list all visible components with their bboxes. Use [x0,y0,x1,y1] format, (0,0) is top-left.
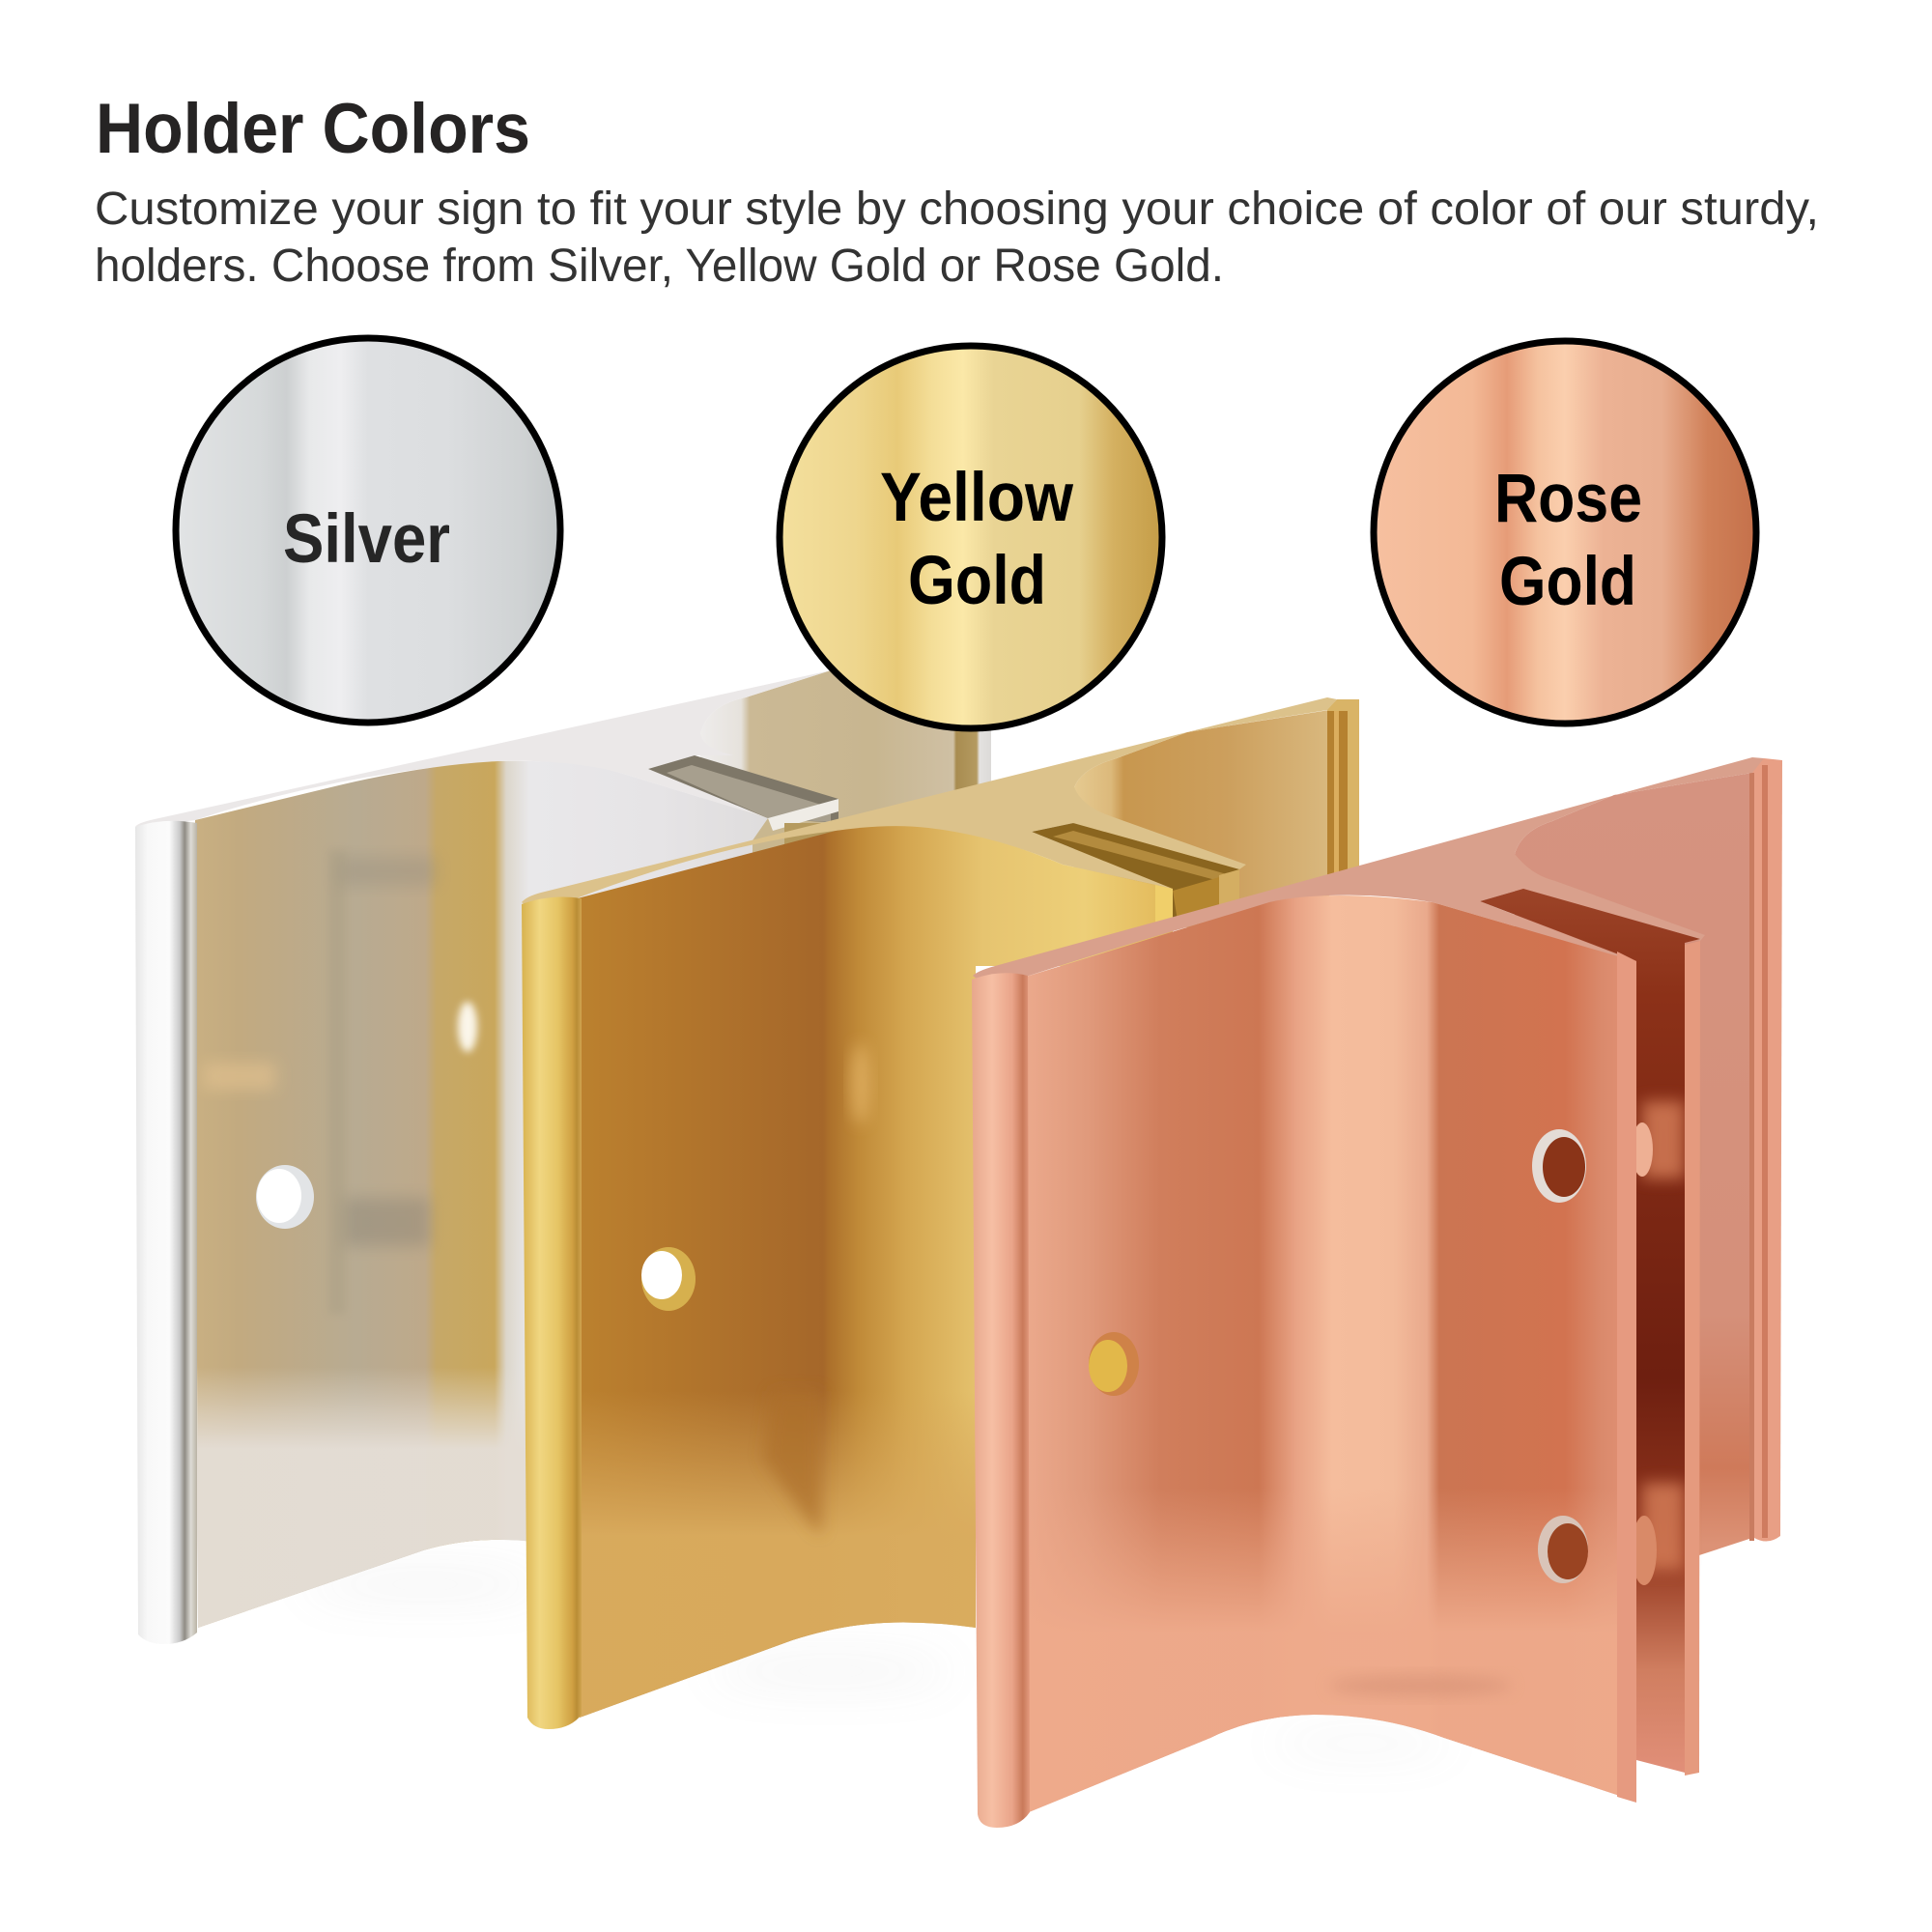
gold lip highlight [1155,885,1173,927]
gold back panel [1074,710,1329,927]
description text [95,184,1819,292]
title: Holder Colors [96,90,530,168]
silver front face [195,761,768,1628]
silver reflections [203,850,477,1314]
silver right rim [753,802,838,898]
shadows under holders [299,1571,1459,1755]
gold dark wedge [763,1391,821,1536]
gold center reflection [851,1043,870,1124]
gold hole [641,1247,696,1311]
silver hole [256,1165,314,1229]
silver back panel [700,667,991,850]
rose flange [972,973,1030,1828]
rose top face [973,757,1764,980]
gold lower fade [578,1391,976,1718]
rose lower hole [1538,1516,1588,1583]
gold back flange [1327,699,1359,884]
rose gold holder [972,757,1782,1828]
rose back flange [1752,758,1782,1542]
gold t-slot [1032,823,1239,927]
label: yellow gold [880,460,1074,619]
label: rose gold [1494,461,1642,620]
rose right lip [1617,952,1636,1803]
gold flange [522,896,582,1729]
rose slot interior [1480,889,1700,1773]
rose top face band [1515,854,1705,941]
rose back panel [1515,773,1752,1555]
label: rose gold: Rose [1494,461,1642,537]
rose slot rim [1685,941,1700,1776]
swatch: silver [176,338,560,723]
silver flange [135,821,197,1644]
rose front face [1026,895,1634,1812]
gold top face [522,697,1337,906]
rose slot highlights [1632,1101,1685,1585]
yellow gold holder [522,697,1359,1729]
label: silver: Silver [283,501,450,578]
silver holder [135,667,991,1644]
label: yellow gold: Gold [908,543,1046,619]
label: yellow gold: Yellow [880,460,1074,536]
description text: Customize your sign to fit your style by choosing your choice of color of our sturdy, [95,184,1819,235]
gold front face [574,826,1173,1718]
rose left hole [1089,1332,1139,1396]
rose lower fade [1026,1488,1634,1812]
swatch: rose gold [1374,341,1756,724]
description text: holders. Choose from Silver, Yellow Gold or Rose Gold. [95,241,1224,292]
gold top face band [1073,787,1246,869]
silver lower fade [195,1352,753,1628]
label: rose gold: Gold [1499,544,1636,620]
rose upper hole [1532,1129,1586,1203]
swatch: yellow gold [780,346,1162,728]
silver top face [135,670,831,827]
silver t-slot [648,755,838,871]
rose bottom reflection [1328,1675,1512,1696]
